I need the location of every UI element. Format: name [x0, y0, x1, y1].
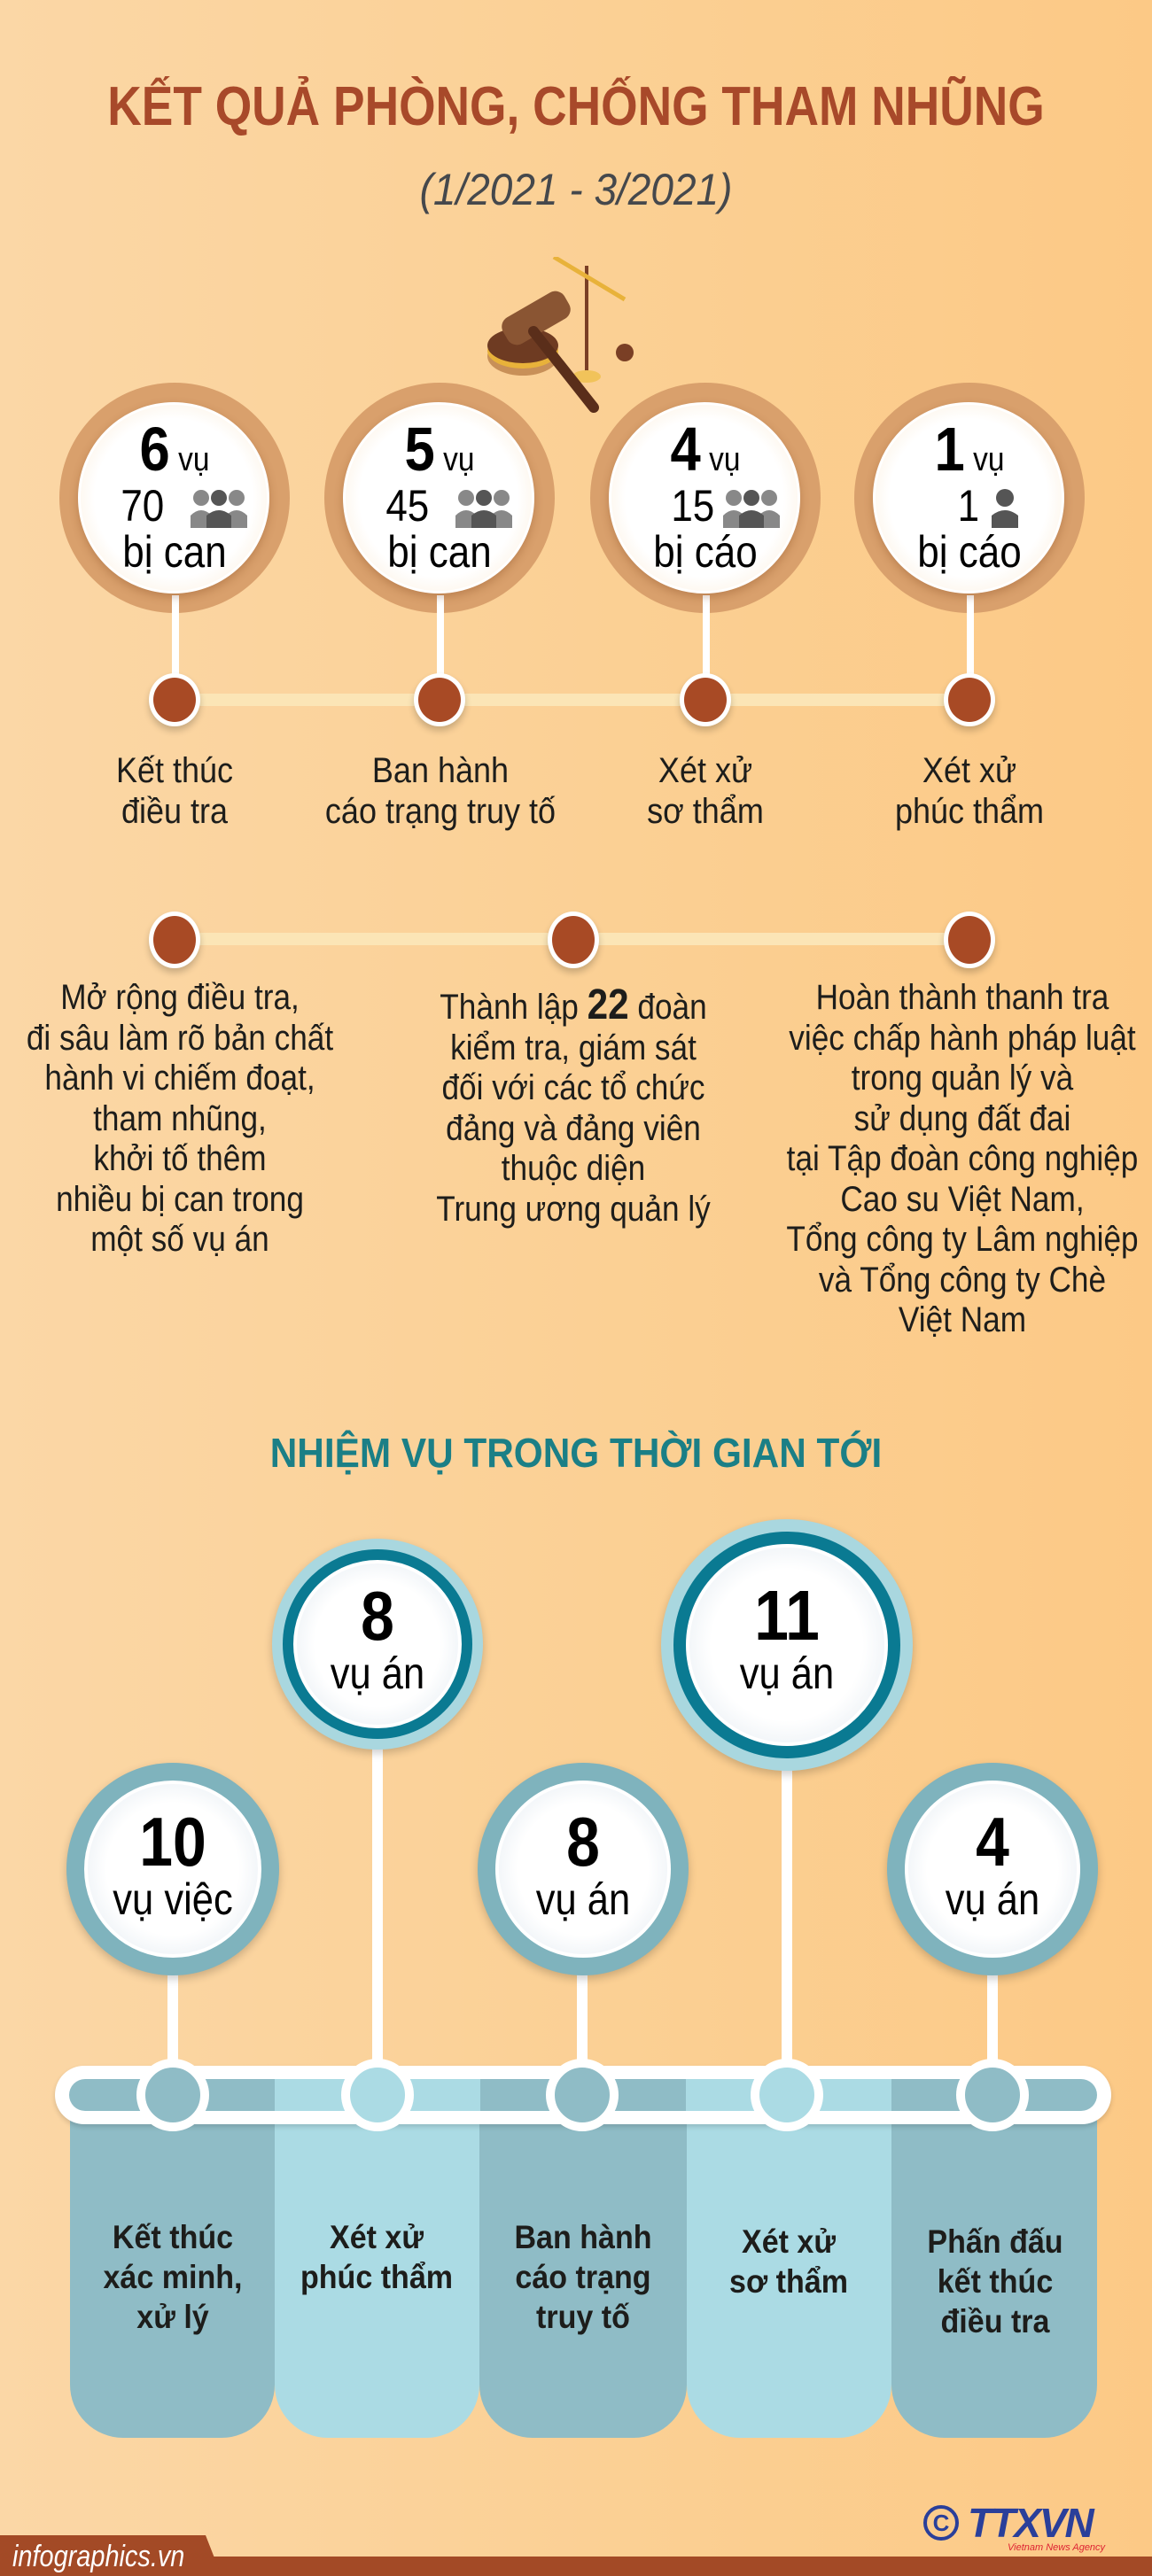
circle: 1 vụ 1 bị cáo: 1 vụ [935, 415, 1004, 484]
circle: 4 vụ án [887, 1763, 1098, 1975]
text: column 1: tham nhũng, [93, 1098, 267, 1137]
column text: Ban hành cáo trạng truy tố [514, 2219, 652, 2335]
label: Kết thúc điều tra: điều tra [121, 792, 228, 831]
text: column 2: đối với các tổ chức [441, 1068, 705, 1107]
text: column 2: thuộc diện [502, 1149, 645, 1188]
column text: Kết thúc xác minh, xử lý [103, 2219, 243, 2335]
circle: 5 vụ 45 bị can: bị can [387, 527, 492, 577]
circle: 10 vụ việc: 10 [139, 1803, 206, 1881]
circle: 5 vụ 45 bị can [324, 383, 555, 673]
circle: 6 vụ 70 bị can: 6 vụ [140, 415, 209, 484]
stems [167, 1967, 178, 2091]
column text: Xét xử phúc thẩm: Xét xử [330, 2219, 424, 2255]
text: column 1: đi sâu làm rõ bản chất [27, 1019, 333, 1058]
circle: 8 vụ án (top) [272, 1539, 483, 1750]
horizontal connector line [177, 694, 970, 706]
heading: tasks: NHIỆM VỤ TRONG THỜI GIAN TỚI [270, 1430, 882, 1476]
circle: 1 vụ 1 bị cáo [854, 383, 1085, 673]
text: column 3: và Tổng công ty Chè [819, 1260, 1106, 1299]
circle: 11 vụ án: vụ án [740, 1649, 834, 1698]
text: column 2: Thành lập 22 đoàn [440, 982, 707, 1028]
circle: 4 vụ án: 4 [976, 1803, 1009, 1881]
text: column 3: Cao su Việt Nam, [840, 1180, 1085, 1219]
circle: 4 vụ 15 bị cáo: bị cáo [653, 527, 758, 577]
column text: Xét xử phúc thẩm [300, 2219, 453, 2295]
circle: 8 vụ án (top): vụ án [331, 1649, 424, 1698]
circle: 5 vụ 45 bị can: 45 [385, 481, 429, 531]
column text: Xét xử sơ thẩm: Xét xử [742, 2223, 836, 2260]
circle: 6 vụ 70 bị can [59, 383, 290, 673]
text: column 1 [27, 978, 333, 1259]
text: column 1: Mở rộng điều tra, [60, 978, 300, 1017]
circle: 11 vụ án [661, 1519, 913, 1771]
dots [149, 673, 200, 726]
text: column 3: việc chấp hành pháp luật [789, 1019, 1136, 1058]
text: column 2: đảng và đảng viên [446, 1109, 701, 1148]
columns [70, 2099, 275, 2438]
column text: Xét xử phúc thẩm: phúc thẩm [300, 2259, 453, 2295]
column text: Phấn đấu kết thúc điều tra [927, 2223, 1063, 2339]
text: column 3: trong quản lý và [852, 1059, 1073, 1098]
icon: gavel and scales [487, 257, 634, 413]
column text: Kết thúc xác minh, xử lý: xử lý [136, 2299, 209, 2335]
circle: 8 vụ án (bottom) [478, 1763, 689, 1975]
column text: Xét xử sơ thẩm: sơ thẩm [729, 2263, 848, 2300]
logo: TTXVN [923, 2500, 1106, 2553]
label: Ban hành cáo trạng truy tố [325, 751, 556, 831]
label: Kết thúc điều tra: Kết thúc [116, 751, 233, 790]
title: KẾT QUẢ PHÒNG, CHỐNG THAM NHŨNG [107, 76, 1045, 137]
footer: infographics.vn [12, 2540, 184, 2573]
text: column 2 [436, 982, 711, 1228]
footer [0, 2535, 1152, 2576]
second timeline [145, 912, 998, 976]
label: Xét xử phúc thẩm: Xét xử [922, 751, 1016, 790]
subtitle: (1/2021 - 3/2021) [420, 165, 732, 214]
bottom timeline [53, 1518, 1113, 2438]
circle: 4 vụ 15 bị cáo: 15 [671, 481, 714, 531]
circle: 4 vụ án: vụ án [946, 1874, 1039, 1924]
text: column 3: tại Tập đoàn công nghiệp [787, 1139, 1138, 1178]
top circles row [59, 383, 1085, 733]
circle: 5 vụ 45 bị can: 5 vụ [405, 415, 474, 484]
text: column 3: Hoàn thành thanh tra [816, 978, 1109, 1017]
circle: 10 vụ việc [66, 1763, 279, 1975]
label: Ban hành cáo trạng truy tố: cáo trạng truy tố [325, 792, 556, 831]
text: column 1: nhiều bị can trong [56, 1180, 304, 1219]
column text: Xét xử sơ thẩm [729, 2223, 848, 2300]
column text: Kết thúc xác minh, xử lý: Kết thúc [113, 2219, 233, 2255]
text: column 3 [786, 978, 1139, 1339]
circle: 10 vụ việc: vụ việc [113, 1874, 233, 1924]
column text: Ban hành cáo trạng truy tố: truy tố [536, 2299, 630, 2335]
label: Xét xử phúc thẩm [895, 751, 1044, 831]
column text: Phấn đấu kết thúc điều tra: Phấn đấu [927, 2223, 1063, 2260]
label: Xét xử sơ thẩm [647, 751, 764, 831]
circle: 1 vụ 1 bị cáo: bị cáo [917, 527, 1022, 577]
bar [55, 2066, 1111, 2124]
circle: 8 vụ án (top): 8 [361, 1577, 394, 1655]
column text: Ban hành cáo trạng truy tố: Ban hành [514, 2219, 652, 2255]
text: column 3: sử dụng đất đai [854, 1098, 1070, 1137]
text: column 1: hành vi chiếm đoạt, [44, 1059, 315, 1098]
label: Ban hành cáo trạng truy tố: Ban hành [372, 751, 509, 790]
label: Xét xử sơ thẩm: Xét xử [658, 751, 752, 790]
circle: 1 vụ 1 bị cáo: 1 [958, 481, 979, 531]
bar dots [136, 2059, 209, 2131]
circle: 11 vụ án: 11 [754, 1576, 820, 1655]
circle: 8 vụ án (bottom): vụ án [536, 1874, 630, 1924]
circle: 4 vụ 15 bị cáo: 4 vụ [671, 415, 740, 484]
logo: TTXVN: TTXVN [968, 2500, 1093, 2546]
text: column 2: kiểm tra, giám sát [450, 1028, 697, 1067]
column text: Ban hành cáo trạng truy tố: cáo trạng [515, 2259, 651, 2295]
circle: 4 vụ 15 bị cáo [590, 383, 821, 673]
circle: 8 vụ án (bottom): 8 [566, 1803, 600, 1881]
text: column 1: một số vụ án [90, 1220, 269, 1259]
column text: Phấn đấu kết thúc điều tra: điều tra [941, 2303, 1049, 2339]
text: column 3: Việt Nam [899, 1300, 1026, 1339]
label: Xét xử phúc thẩm: phúc thẩm [895, 792, 1044, 831]
column text: Kết thúc xác minh, xử lý: xác minh, [103, 2259, 243, 2295]
logo: TTXVN: C [933, 2510, 949, 2536]
circle: 6 vụ 70 bị can: bị can [122, 527, 227, 577]
label: Xét xử sơ thẩm: sơ thẩm [647, 792, 764, 831]
column text: Phấn đấu kết thúc điều tra: kết thúc [938, 2263, 1053, 2300]
circle: 6 vụ 70 bị can: 70 [121, 481, 164, 531]
label: Kết thúc điều tra [116, 751, 233, 831]
text: column 2: Trung ương quản lý [436, 1189, 711, 1228]
logo: TTXVN: Vietnam News Agency [1008, 2542, 1105, 2553]
text: column 3: Tổng công ty Lâm nghiệp [786, 1220, 1139, 1259]
text: column 1: khởi tố thêm [93, 1139, 267, 1178]
